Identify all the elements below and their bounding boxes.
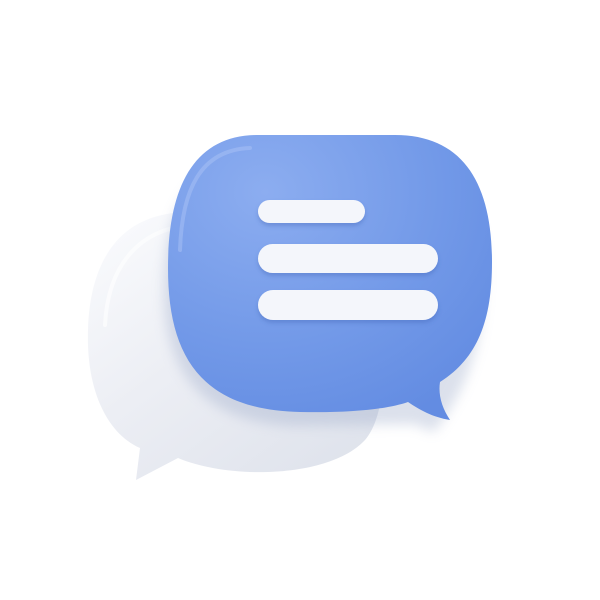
blue bubble (front) xyxy=(168,135,492,420)
text line 2 xyxy=(258,244,438,273)
text line 1 xyxy=(258,200,365,223)
blue bubble shadow xyxy=(164,162,484,432)
white bubble (back) xyxy=(88,212,384,480)
text line 3 xyxy=(258,290,438,320)
